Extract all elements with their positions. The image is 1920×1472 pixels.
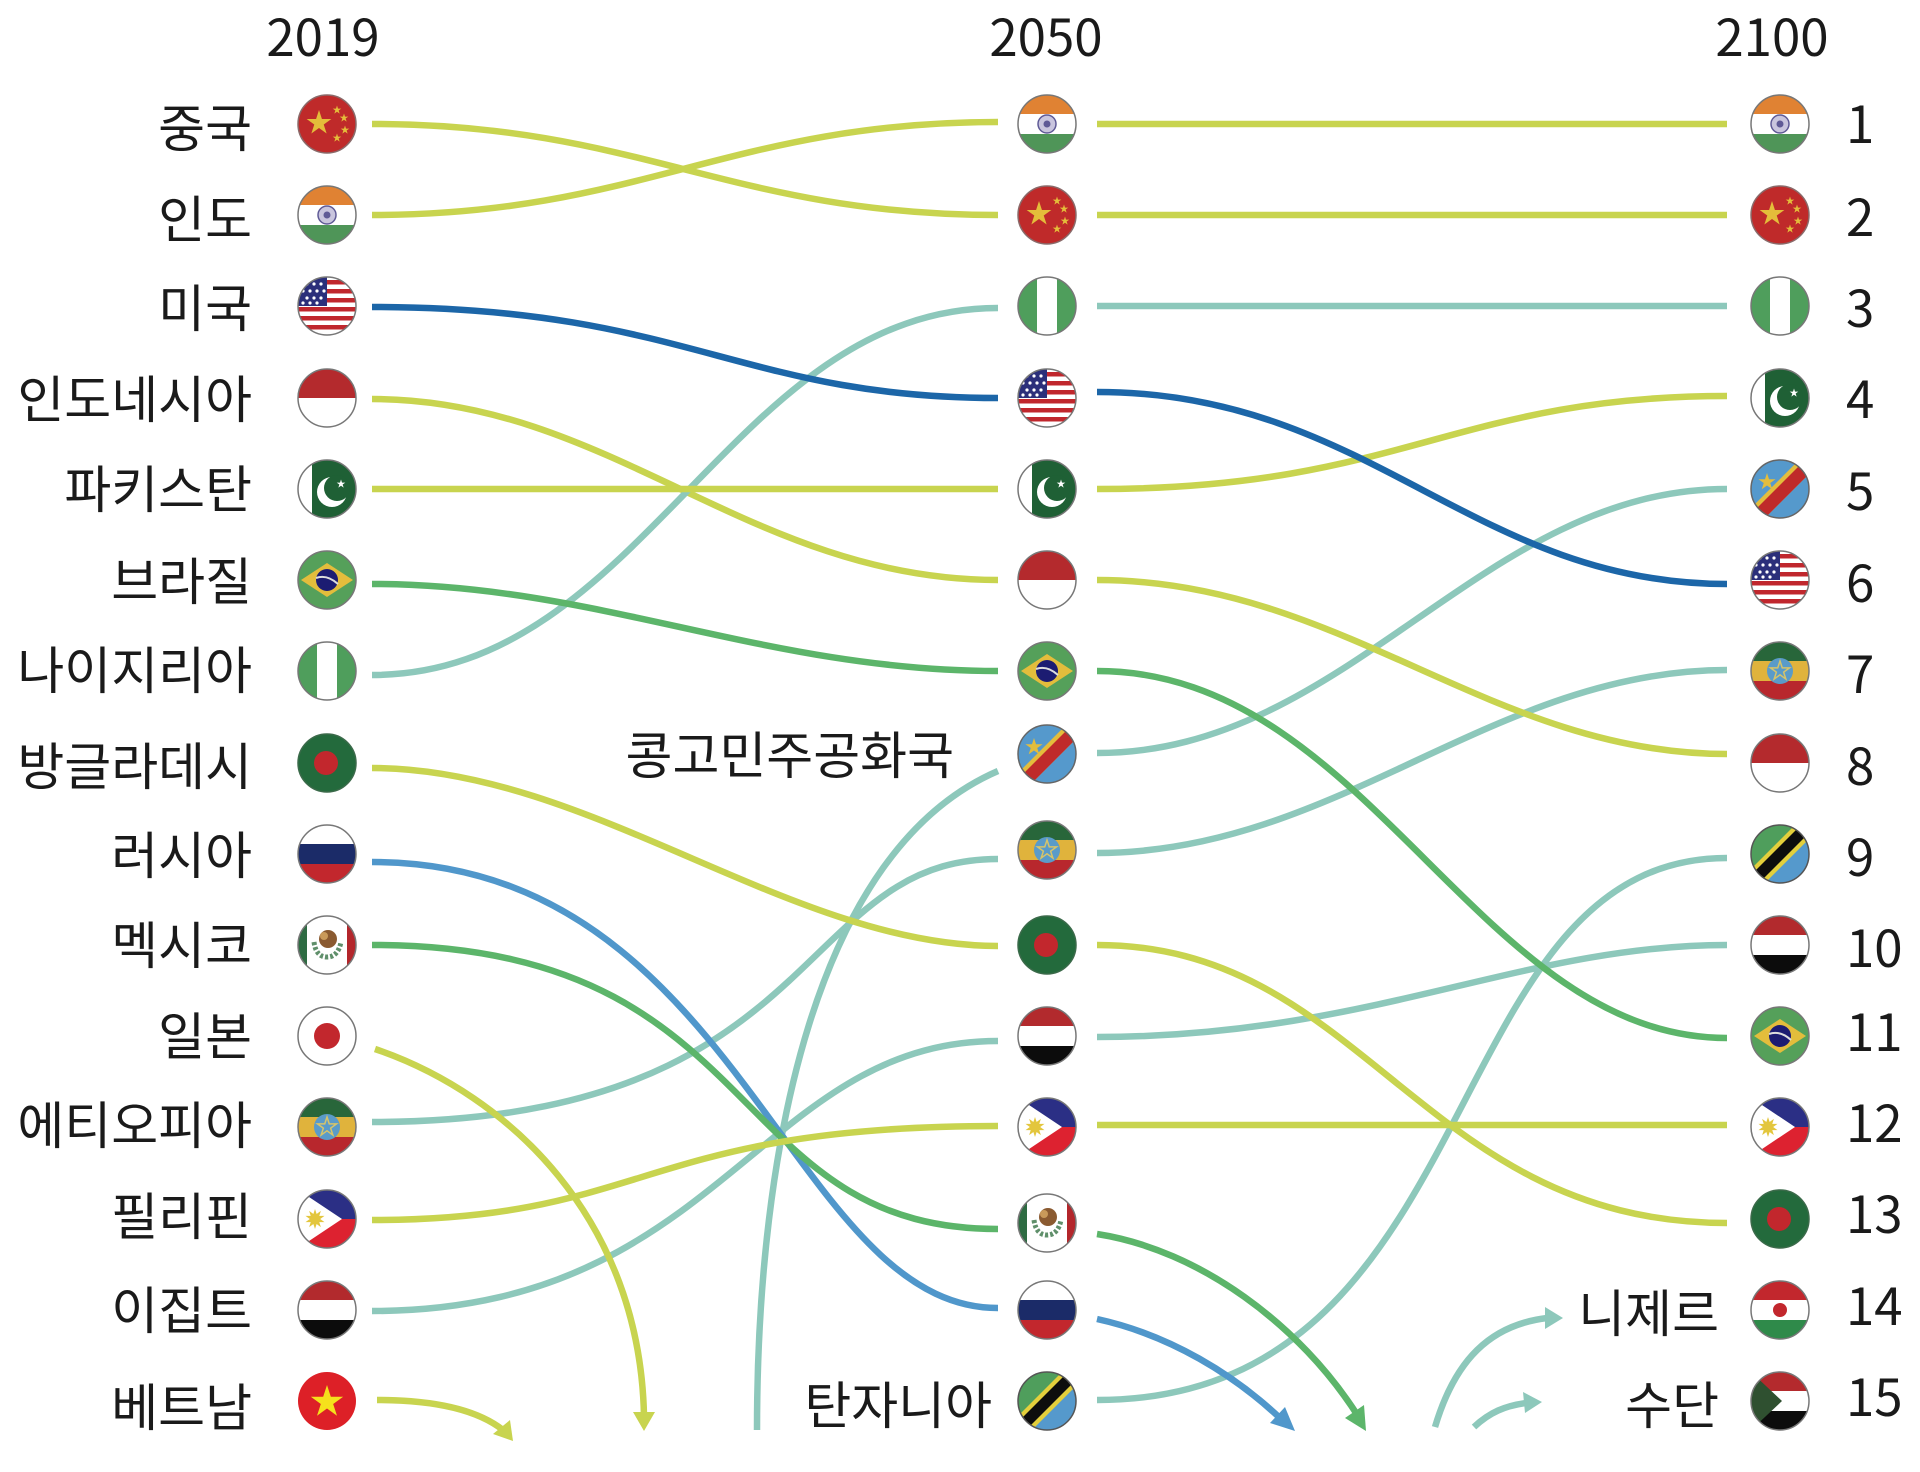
flag: USA — [1750, 550, 1810, 610]
2100 rank numbers — [1846, 84, 1903, 1431]
arrow: Russia leaving top 15 — [1097, 1319, 1295, 1431]
flow: India — [372, 122, 998, 215]
rank 7: 7 — [1846, 634, 1874, 708]
flow: DR Congo — [1097, 489, 1727, 753]
flow: Pakistan — [372, 486, 998, 492]
flow: Russia — [372, 862, 998, 1308]
year headings — [266, 0, 1829, 71]
flow: Bangladesh — [1097, 945, 1727, 1223]
flag: Nigeria — [1017, 276, 1077, 336]
rank 4: 4 — [1846, 359, 1874, 433]
flow: Nigeria — [1097, 303, 1727, 309]
flag: Pakistan — [1750, 368, 1810, 428]
flag: USA — [1017, 368, 1077, 428]
flag: Philippines — [1750, 1097, 1810, 1157]
rank 15: 15 — [1846, 1357, 1903, 1431]
flow: Philippines — [1097, 1122, 1727, 1128]
flag: Bangladesh — [297, 733, 357, 793]
arrow: Japan leaving top 15 — [375, 1049, 655, 1431]
arrow: Mexico leaving top 15 — [1097, 1234, 1366, 1431]
name: Indonesia: 인도네시아 — [17, 359, 252, 433]
name: China: 중국 — [158, 88, 252, 162]
2050 flags — [1017, 94, 1081, 1431]
flag: USA — [297, 276, 357, 336]
2100 flags — [1750, 94, 1814, 1431]
flow: DR Congo rising — [757, 771, 998, 1430]
rank 10: 10 — [1846, 908, 1903, 982]
rank 5: 5 — [1846, 451, 1874, 525]
flow: Pakistan — [1097, 396, 1727, 489]
flag: Brazil — [297, 550, 357, 610]
flag: Sudan — [1750, 1371, 1810, 1431]
flag: Ethiopia — [1017, 820, 1077, 880]
flag: China — [1017, 185, 1077, 245]
name: USA: 미국 — [158, 268, 252, 342]
name: Japan: 일본 — [158, 996, 252, 1070]
flag: Pakistan — [1017, 459, 1077, 519]
flow: Ethiopia — [1097, 670, 1727, 853]
flow: Philippines — [372, 1126, 998, 1220]
flow: China — [1097, 212, 1727, 218]
flag: Vietnam — [298, 1372, 356, 1430]
2019 country names — [17, 88, 252, 1441]
flag: Ethiopia — [1750, 641, 1810, 701]
flag: DR Congo — [1750, 459, 1814, 523]
2019 flags — [297, 94, 357, 1430]
flag: DR Congo — [1017, 724, 1081, 788]
arrow: Niger entering top 15 — [1435, 1307, 1563, 1427]
flag: Russia — [297, 824, 357, 884]
rank 2: 2 — [1846, 177, 1874, 251]
flag: Bangladesh — [1750, 1189, 1810, 1249]
name: Ethiopia: 에티오피아 — [17, 1085, 252, 1159]
flag: Indonesia — [1017, 550, 1077, 610]
flag: Egypt — [297, 1280, 357, 1340]
flag: India — [1750, 94, 1810, 154]
flag: Bangladesh — [1017, 915, 1077, 975]
flow: India — [1097, 121, 1727, 127]
flag: Tanzania — [1017, 1371, 1077, 1431]
flow: China — [372, 124, 998, 215]
rank 1: 1 — [1846, 84, 1874, 158]
name: Tanzania: 탄자니아 — [804, 1365, 992, 1439]
flow: Egypt — [1097, 945, 1727, 1037]
rank 14: 14 — [1846, 1266, 1903, 1340]
rank 6: 6 — [1846, 543, 1874, 617]
name: India: 인도 — [158, 179, 252, 253]
name: Niger: 니제르 — [1578, 1273, 1719, 1347]
name: Brazil: 브라질 — [111, 541, 252, 615]
flows from 2050 to 2100 — [1097, 124, 1727, 1431]
name: Sudan: 수단 — [1625, 1365, 1719, 1439]
flag: Egypt — [1750, 915, 1810, 975]
name: Russia: 러시아 — [111, 815, 252, 889]
flow: Egypt — [372, 1041, 998, 1311]
flow: Brazil — [1097, 671, 1727, 1038]
flag: Brazil — [1750, 1006, 1810, 1066]
flag: Niger — [1750, 1280, 1810, 1340]
flow: USA — [372, 307, 998, 398]
flow: Bangladesh — [372, 768, 998, 946]
flag: India — [297, 185, 357, 245]
flag: Tanzania — [1750, 824, 1810, 884]
flag: Indonesia — [297, 368, 357, 428]
rank 3: 3 — [1846, 268, 1874, 342]
rank 8: 8 — [1846, 726, 1874, 800]
flow: Mexico — [372, 945, 998, 1229]
flows from 2019 to 2050 — [372, 122, 998, 1441]
flag: Ethiopia — [297, 1097, 357, 1157]
name: Bangladesh: 방글라데시 — [17, 726, 252, 800]
arrow: Sudan entering top 15 — [1474, 1392, 1542, 1427]
name: DR Congo: 콩고민주공화국 — [626, 715, 954, 789]
flow: USA — [1097, 392, 1727, 584]
name: Nigeria: 나이지리아 — [17, 630, 252, 704]
flag: Egypt — [1017, 1006, 1077, 1066]
flag: Philippines — [1017, 1097, 1077, 1157]
flow: Brazil — [372, 584, 998, 671]
name: Vietnam: 베트남 — [111, 1367, 252, 1441]
flow: Indonesia — [372, 399, 998, 580]
flow: Tanzania — [1097, 858, 1727, 1400]
flag: Mexico — [297, 915, 357, 975]
arrow: Vietnam leaving top 15 — [377, 1400, 513, 1441]
flag: Brazil — [1017, 641, 1077, 701]
flag: India — [1017, 94, 1077, 154]
flag: Nigeria — [1750, 276, 1810, 336]
flag: Japan — [298, 1007, 356, 1065]
flag: Nigeria — [297, 641, 357, 701]
rank 12: 12 — [1846, 1083, 1903, 1157]
flow: Ethiopia — [372, 859, 998, 1122]
name: Philippines: 필리핀 — [111, 1176, 252, 1250]
flag: Mexico — [1017, 1193, 1077, 1253]
rank 9: 9 — [1846, 817, 1874, 891]
flag: China — [297, 94, 357, 154]
rank 13: 13 — [1846, 1174, 1903, 1248]
flag: Philippines — [297, 1189, 357, 1249]
rank 11: 11 — [1846, 992, 1903, 1066]
flow: Nigeria — [372, 308, 998, 675]
flow: Indonesia — [1097, 580, 1727, 754]
name: Mexico: 멕시코 — [111, 905, 252, 979]
name: Egypt: 이집트 — [111, 1270, 252, 1344]
flag: Russia — [1017, 1280, 1077, 1340]
flag: China — [1750, 185, 1810, 245]
flag: Pakistan — [297, 459, 357, 519]
flag: Indonesia — [1750, 733, 1810, 793]
name: Pakistan: 파키스탄 — [64, 449, 252, 523]
